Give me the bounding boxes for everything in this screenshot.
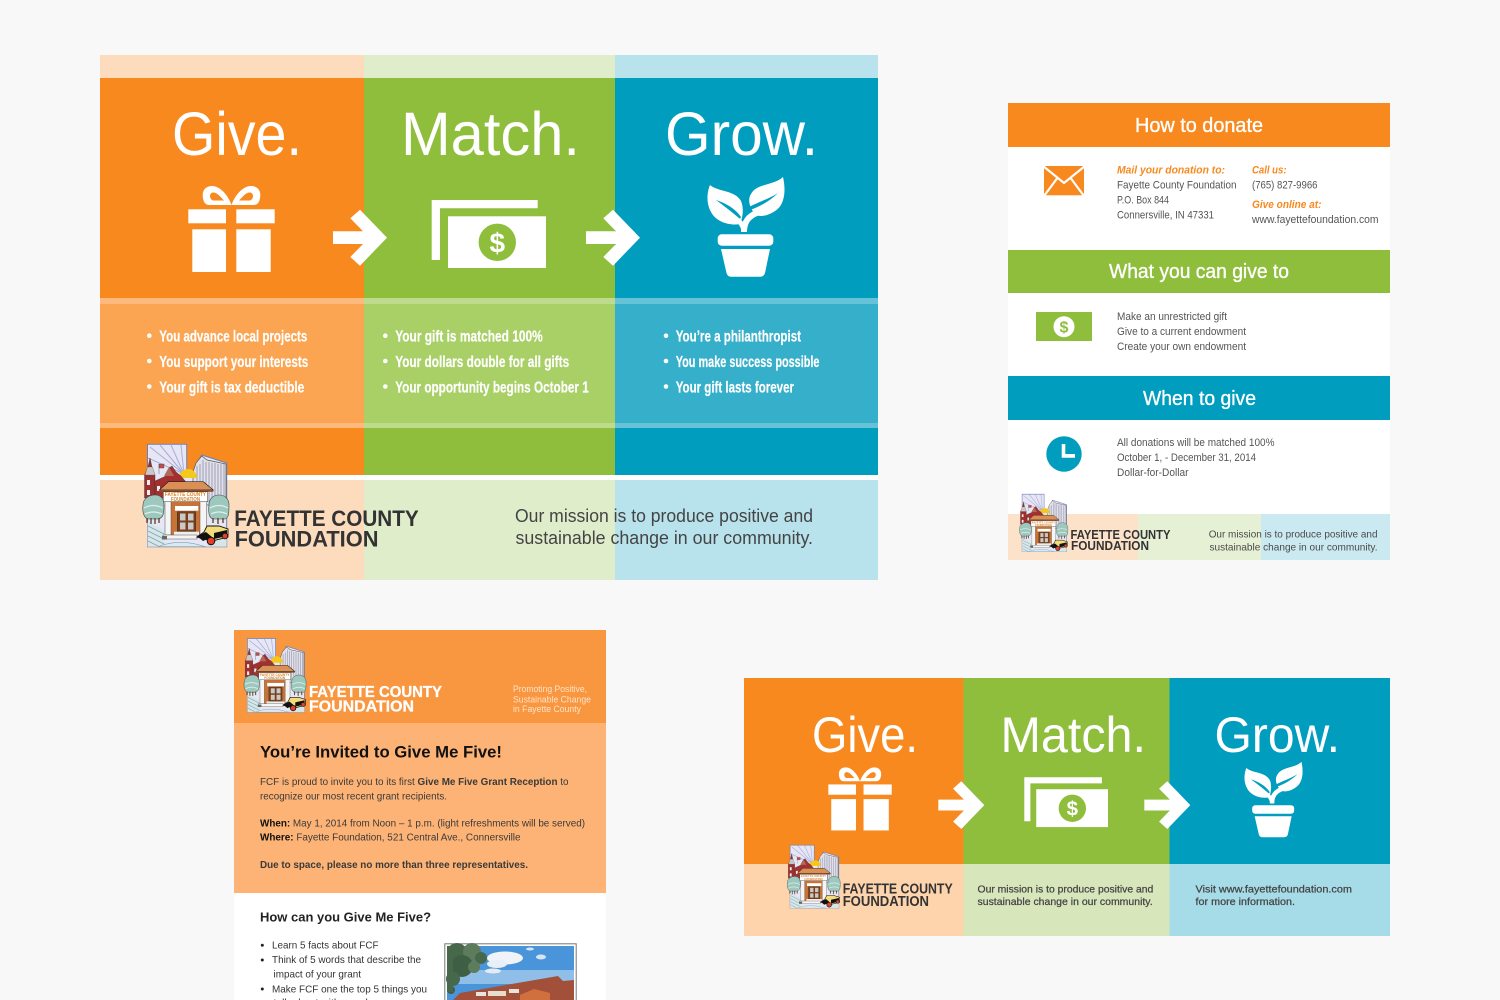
text: mission banner bbox=[978, 883, 1153, 908]
text: giving dates: Dollar-for-Dollar bbox=[1117, 467, 1189, 479]
bullet list: grow: You make success possible bbox=[676, 354, 820, 371]
text: phone and web: www.fayettefoundation.com bbox=[1251, 214, 1378, 226]
logo: wordmark banner: FAYETTE COUNTY bbox=[843, 882, 953, 898]
icon: gift small bbox=[828, 767, 892, 830]
heading: Grow small: Grow. bbox=[1214, 707, 1340, 763]
text: giving options: Make an unrestricted gift bbox=[1117, 311, 1227, 323]
icon: dollar bills bbox=[432, 200, 546, 268]
text: phone and web: Call us: bbox=[1252, 164, 1287, 176]
text: mission statement: sustainable change in our community. bbox=[516, 528, 813, 548]
text: tagline: in Fayette County bbox=[513, 704, 581, 714]
heading: how can you give me five: How can you Give Me Five? bbox=[260, 911, 431, 925]
logo: illustration bbox=[143, 444, 229, 547]
text: tagline bbox=[513, 684, 591, 714]
text: invitation body: FCF is proud to invite you to its first Give Me Five Grant Reception to bbox=[260, 777, 569, 788]
text: website: Visit www.fayettefoundation.com bbox=[1196, 883, 1352, 895]
arrow: give to match small bbox=[938, 781, 984, 829]
panel: large Give Match Grow banner bbox=[100, 55, 878, 580]
bullet list: ways to give: impact of your grant bbox=[274, 968, 361, 980]
logo: wordmark small bbox=[1070, 528, 1171, 553]
header: how to donate bbox=[1008, 103, 1390, 147]
logo: wordmark banner: FOUNDATION bbox=[843, 894, 929, 910]
panel: how to donate flyer bbox=[1008, 103, 1390, 560]
logo: illustration email bbox=[244, 638, 306, 712]
icon: dollar bill: $ bbox=[1060, 320, 1069, 336]
arrow: give to match bbox=[333, 210, 387, 266]
logo: wordmark small: FAYETTE COUNTY bbox=[1070, 528, 1171, 542]
logo: wordmark: FOUNDATION bbox=[235, 527, 378, 552]
text: mail address: Fayette County Foundation bbox=[1117, 180, 1236, 192]
text: invitation body: Due to space, please no more than three representatives. bbox=[260, 860, 528, 871]
text: mail address: P.O. Box 844 bbox=[1117, 194, 1169, 206]
text: giving dates: All donations will be matched 100% bbox=[1117, 437, 1275, 449]
heading: Grow: Grow. bbox=[665, 100, 818, 168]
icon: clock bbox=[1046, 436, 1082, 472]
text: invitation body: Where: Fayette Foundation, 521 Central Ave., Connersville bbox=[260, 832, 521, 844]
icon: dollar bill bbox=[1036, 312, 1092, 341]
heading: Give small: Give. bbox=[812, 707, 918, 763]
header: how to donate: How to donate bbox=[1135, 115, 1263, 137]
heading: invitation: You’re Invited to Give Me Five! bbox=[260, 744, 502, 762]
logo: wordmark email: FOUNDATION bbox=[309, 698, 414, 715]
header: what you can give to: What you can give to bbox=[1109, 261, 1289, 283]
text: website: for more information. bbox=[1196, 896, 1295, 908]
logo: wordmark: FAYETTE COUNTY bbox=[234, 506, 419, 531]
text: mission small: Our mission is to produce positive and bbox=[1209, 528, 1378, 540]
text: website bbox=[1196, 883, 1352, 908]
bullet list: match: Your gift is matched 100% bbox=[395, 329, 543, 346]
text: mission banner: Our mission is to produce positive and bbox=[978, 883, 1153, 895]
header: when to give: When to give bbox=[1143, 388, 1256, 410]
photo: foundation building bbox=[445, 943, 576, 1000]
bullet list: grow: You’re a philanthropist bbox=[676, 329, 801, 346]
text: mission small bbox=[1209, 528, 1378, 554]
text: tagline: Promoting Positive, bbox=[513, 684, 587, 694]
arrow: match to grow bbox=[586, 210, 640, 266]
text: mail address: Mail your donation to: bbox=[1117, 164, 1225, 176]
logo: wordmark banner bbox=[843, 882, 953, 910]
text: giving options: Create your own endowment bbox=[1117, 341, 1246, 353]
logo: illustration banner bbox=[787, 845, 840, 908]
bullet list: give: You support your interests bbox=[159, 354, 308, 371]
logo: illustration small bbox=[1019, 494, 1068, 552]
text: giving options: Give to a current endowment bbox=[1117, 326, 1246, 338]
text: invitation body bbox=[260, 777, 585, 871]
logo: wordmark email: FAYETTE COUNTY bbox=[309, 684, 442, 701]
text: phone and web: (765) 827-9966 bbox=[1252, 180, 1318, 192]
text: invitation body: When: May 1, 2014 from Noon – 1 p.m. (light refreshments will be served) bbox=[260, 818, 585, 830]
bullet list: match bbox=[383, 329, 589, 396]
logo: wordmark email bbox=[309, 684, 442, 715]
logo: wordmark small: FOUNDATION bbox=[1071, 539, 1149, 553]
bullet list: give: Your gift is tax deductible bbox=[159, 380, 304, 396]
bullet list: ways to give bbox=[261, 939, 427, 1000]
bullet list: match: Your opportunity begins October 1 bbox=[395, 380, 589, 396]
icon: gift bbox=[188, 186, 275, 272]
text: mission statement: Our mission is to produce positive and bbox=[515, 506, 813, 526]
bullet list: ways to give: Learn 5 facts about FCF bbox=[272, 939, 378, 951]
text: mail address bbox=[1117, 164, 1236, 222]
bullet list: ways to give: Think of 5 words that describe the bbox=[272, 954, 421, 966]
icon: dollar bills small bbox=[1024, 777, 1108, 827]
heading: Give: Give. bbox=[172, 100, 302, 168]
heading: Match: Match. bbox=[401, 100, 580, 168]
icon: envelope bbox=[1043, 166, 1085, 196]
text: mail address: Connersville, IN 47331 bbox=[1117, 210, 1214, 222]
text: giving dates: October 1, - December 31, 2014 bbox=[1117, 452, 1256, 464]
bullet list: grow: Your gift lasts forever bbox=[676, 380, 794, 396]
bullet list: give: You advance local projects bbox=[159, 329, 307, 346]
text: invitation body: recognize our most recent grant recipients. bbox=[260, 792, 447, 802]
footer band bbox=[1008, 514, 1390, 560]
header: what you can give to bbox=[1008, 250, 1390, 293]
text: mission banner: sustainable change in our community. bbox=[978, 896, 1153, 908]
text: phone and web: Give online at: bbox=[1252, 199, 1322, 211]
text: giving options bbox=[1117, 311, 1246, 353]
bullet list: ways to give: Make FCF one the top 5 things you bbox=[272, 984, 427, 996]
icon: plant bbox=[708, 177, 784, 277]
text: mission small: sustainable change in our community. bbox=[1210, 542, 1378, 554]
panel: email invitation bbox=[234, 630, 606, 1000]
arrow: match to grow small bbox=[1144, 781, 1190, 829]
heading: Match small: Match. bbox=[1000, 707, 1146, 763]
panel: small Give Match Grow banner bbox=[744, 678, 1390, 936]
bullet list: give bbox=[147, 329, 308, 396]
bullet list: match: Your dollars double for all gifts bbox=[395, 354, 569, 371]
text: tagline: Sustainable Change bbox=[513, 694, 591, 704]
icon: plant small bbox=[1244, 762, 1303, 837]
header: when to give bbox=[1008, 376, 1390, 420]
bullet list: grow bbox=[664, 329, 820, 396]
logo: wordmark bbox=[234, 506, 419, 552]
text: phone and web bbox=[1251, 164, 1378, 226]
text: mission statement bbox=[515, 506, 813, 548]
text: giving dates bbox=[1117, 437, 1275, 479]
